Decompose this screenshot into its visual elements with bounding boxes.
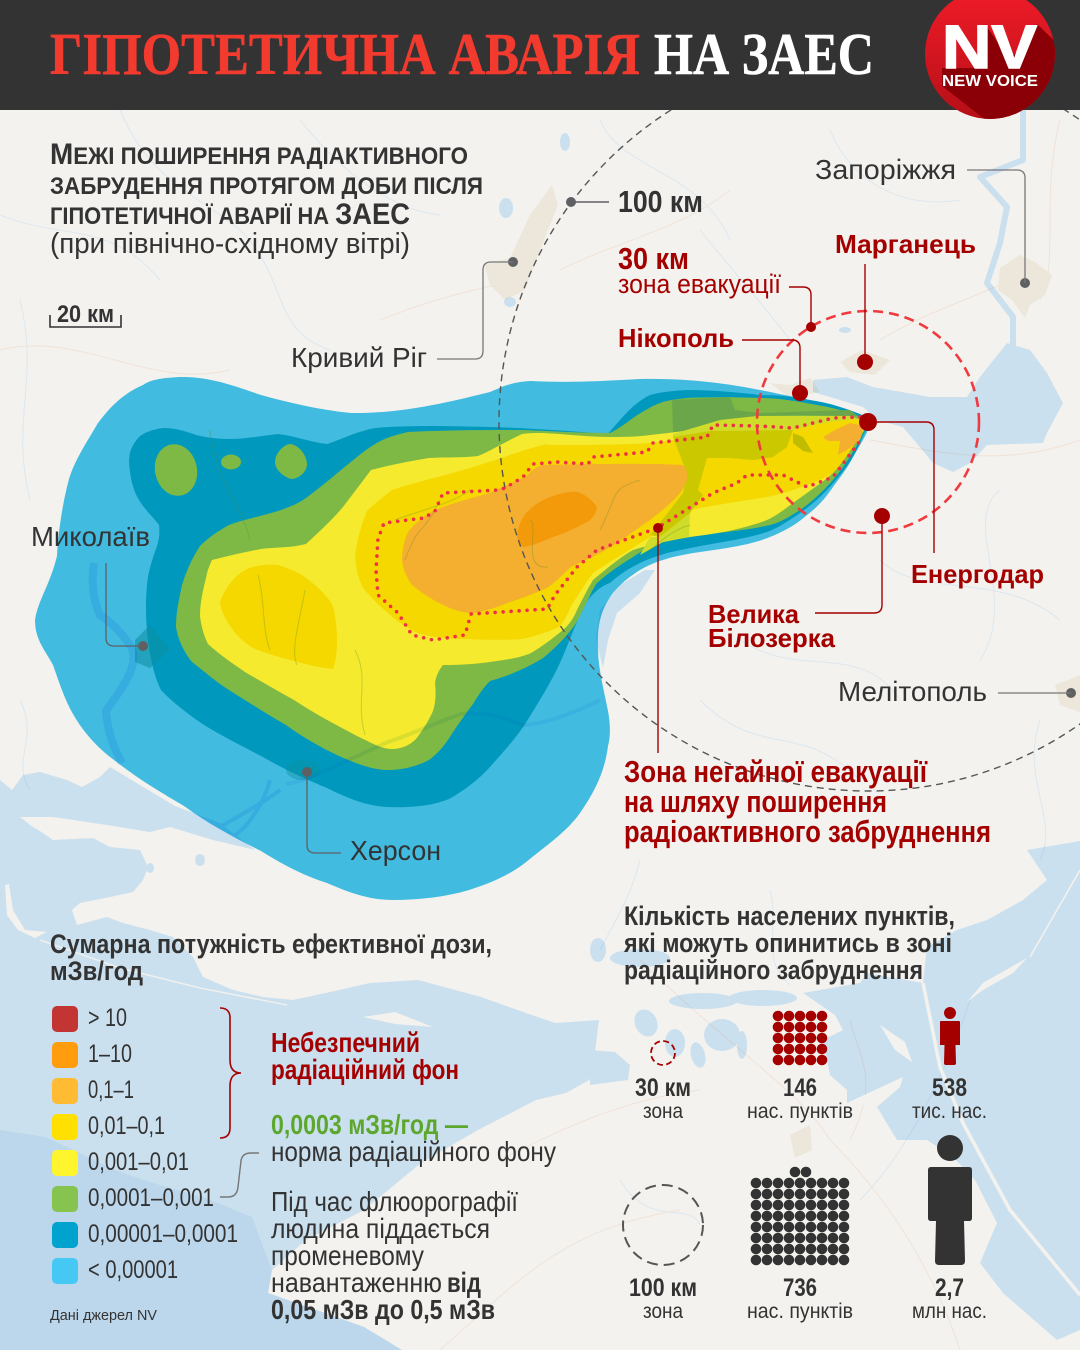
label: Marhanets [835, 229, 976, 370]
city patches [484, 185, 1080, 1158]
stat: 538 thousand people [912, 1007, 987, 1123]
Black Sea and estuary [0, 767, 599, 1350]
legend [52, 1004, 238, 1284]
fluorography text [271, 1186, 518, 1325]
logo: NV New Voice [925, 0, 1055, 119]
dark patch: Kherson [286, 760, 320, 780]
stat: 100 km zone: 100 км [629, 1274, 697, 1302]
Tendra spit [5, 884, 47, 938]
dark green pond [793, 433, 813, 453]
island in bay [363, 1012, 433, 1027]
pale olive wedge [640, 513, 690, 555]
label: 30 km evacuation zone [618, 241, 816, 332]
main subtitle: (при північно-східному вітрі) [50, 228, 410, 260]
green blob 2 [221, 454, 241, 470]
header bar [0, 0, 1080, 110]
label: Zaporizhzhia: Запоріжжя [815, 154, 956, 185]
green blob 3 [275, 444, 307, 479]
label: Mykolaiv [31, 521, 150, 651]
stat: 538 thousand people: тис. нас. [912, 1100, 987, 1123]
norm text: 0,0003 мЗв/год — [271, 1109, 468, 1140]
legend heading: Сумарна потужність ефективної дози, [50, 929, 492, 959]
scale bar: 20 km: 20 км [57, 301, 114, 328]
callout: immediate evacuation zone [624, 523, 991, 849]
30 km dashed circle [757, 311, 979, 533]
title: НА ЗАЕС [654, 21, 874, 87]
legend: 1–10 [88, 1040, 132, 1068]
Bug river [93, 563, 133, 763]
stat: 100 km zone [623, 1185, 703, 1323]
pale olive strip [673, 416, 862, 437]
label: Zaporizhzhia [815, 154, 1030, 288]
zone: 0.01-0.1 [355, 419, 866, 640]
stat: 30 km zone: 30 км [635, 1074, 691, 1102]
callout: immediate evacuation zone: радіоактивного забруднення [624, 814, 991, 849]
source: Дані джерел NV [50, 1307, 157, 1324]
fluorography text: променевому [271, 1240, 424, 1271]
zone: 0.001-0.01 [200, 417, 866, 749]
label: Nikopol [618, 323, 808, 401]
stat: 2.7 million people [912, 1135, 987, 1323]
darker deep sea [0, 1130, 402, 1350]
label: Kryvyi Rih [291, 257, 518, 373]
label: Enerhodar plant: Енергодар [911, 559, 1044, 589]
label: Velyka Bilozerka: Велика [708, 599, 800, 629]
tongue in Syvash [847, 1077, 903, 1107]
stat: 30 km zone: зона [643, 1100, 683, 1123]
legend: > 10 [88, 1004, 127, 1032]
zone: 1-10 [517, 492, 597, 547]
label: Velyka Bilozerka: Білозерка [708, 623, 836, 653]
fluorography text: навантаженню [271, 1267, 442, 1298]
main subtitle: МЕЖІ ПОШИРЕННЯ РАДІАКТИВНОГО [50, 138, 468, 171]
stats heading: Кількість населених пунктів, [624, 901, 955, 931]
main subtitle: ГІПОТЕТИЧНОЇ АВАРІЇ НА ЗАЕС [50, 198, 410, 231]
Dnipro delta [215, 780, 280, 835]
zone: 0.00001-0.0001 [129, 390, 866, 807]
legend: < 0,00001 [88, 1256, 178, 1284]
legend: 0,1–1 [88, 1076, 134, 1104]
dark yellow blob [220, 565, 337, 669]
label: 30 km evacuation zone: 30 км [618, 241, 689, 276]
legend: 0,0001–0,001 [88, 1184, 214, 1212]
norm text [271, 1109, 556, 1167]
Kakhovka reservoir [813, 343, 1063, 472]
norm text: норма радіаційного фону [271, 1136, 556, 1167]
green blob 1 [150, 440, 202, 500]
Fedotova spit [967, 958, 1027, 1002]
Dnipro river north [980, 110, 1023, 350]
label: Mykolaiv: Миколаїв [31, 521, 150, 552]
fluorography text: людина піддається [271, 1213, 490, 1244]
label: 30 km evacuation zone: зона евакуації [618, 269, 781, 299]
label: Enerhodar plant [859, 413, 1044, 589]
stat: 146 settlements: 146 [783, 1074, 817, 1102]
label: Melitopol: Мелітополь [838, 676, 987, 707]
inlet [596, 570, 655, 668]
thin north spit [1030, 870, 1080, 957]
legend: 0,00001–0,0001 [88, 1220, 238, 1248]
callout: immediate evacuation zone: Зона негайної евакуації [624, 754, 928, 789]
main subtitle [50, 138, 483, 260]
river lines over plume [210, 430, 690, 735]
100 km dashed circle [499, 53, 1080, 791]
label: Marhanets: Марганець [835, 229, 976, 259]
logo: NV New Voice: NEW VOICE [942, 73, 1038, 90]
legend: 0,01–0,1 [88, 1112, 165, 1140]
stat: 2.7 million people: 2,7 [935, 1274, 964, 1302]
fluorography text: Під час флюорографії [271, 1186, 518, 1217]
plume: contamination zones [35, 377, 868, 900]
stat: 100 km zone: зона [643, 1300, 683, 1323]
label: Kherson: Херсон [350, 835, 441, 866]
Azov and Syvash [803, 841, 1080, 1340]
zone near plant [823, 423, 864, 455]
label: Melitopol [838, 676, 1076, 707]
connector: norm to legend [220, 1153, 259, 1197]
main subtitle: ЗАБРУДЕННЯ ПРОТЯГОМ ДОБИ ПІСЛЯ [50, 173, 483, 200]
olive overlay [650, 430, 793, 537]
zone: 0.1-1 [402, 464, 687, 613]
legend: 0,001–0,01 [88, 1148, 189, 1176]
land details on water [5, 870, 1080, 1295]
Arabat spit [923, 983, 1080, 1295]
Syvash islets [880, 1025, 912, 1062]
fluorography text: від [447, 1267, 481, 1298]
legend heading: мЗв/год [50, 956, 143, 986]
label: 100 km [566, 184, 703, 219]
fluorography text: 0,05 мЗв до 0,5 мЗв [271, 1294, 495, 1325]
stat: 146 settlements: нас. пунктів [747, 1100, 853, 1123]
darker green overlay [672, 397, 858, 434]
thin spit [40, 940, 287, 1005]
stat: 146 settlements [747, 1011, 853, 1123]
immediate evacuation dotted boundary [376, 417, 863, 640]
dangerous background text: Небезпечний [271, 1027, 420, 1058]
stats heading: радіаційного забруднення [624, 955, 923, 985]
legend heading [50, 929, 492, 986]
logo: NV New Voice: NV [942, 13, 1037, 81]
stats heading: які можуть опинитись в зоні [623, 928, 952, 958]
dark patch: Mykolaiv [135, 625, 170, 668]
zone: below 0.00001 [35, 377, 868, 900]
stat: 538 thousand people: 538 [932, 1074, 967, 1102]
dangerous background text: радіаційний фон [271, 1054, 459, 1085]
label: Kryvyi Rih: Кривий Ріг [291, 342, 427, 373]
stat: 736 settlements: нас. пунктів [747, 1300, 853, 1323]
lakes [146, 133, 851, 1085]
stat: 30 km zone [635, 1041, 691, 1123]
stats heading [623, 901, 955, 985]
callout: immediate evacuation zone: на шляху поширення [624, 784, 887, 819]
label: Kherson [302, 767, 441, 866]
label: Nikopol: Нікополь [618, 323, 734, 353]
brace: dangerous levels [220, 1008, 241, 1138]
lower Dnipro [286, 700, 600, 784]
stat: 2.7 million people: млн нас. [912, 1300, 987, 1323]
zone: 0.0001-0.001 [176, 397, 866, 770]
stat: 736 settlements: 736 [783, 1274, 817, 1302]
label: 100 km: 100 км [618, 184, 703, 219]
dangerous background text [271, 1027, 459, 1085]
stat: 736 settlements [747, 1167, 853, 1323]
label: Velyka Bilozerka [708, 508, 890, 653]
title: ГІПОТЕТИЧНА АВАРІЯ [50, 21, 640, 87]
